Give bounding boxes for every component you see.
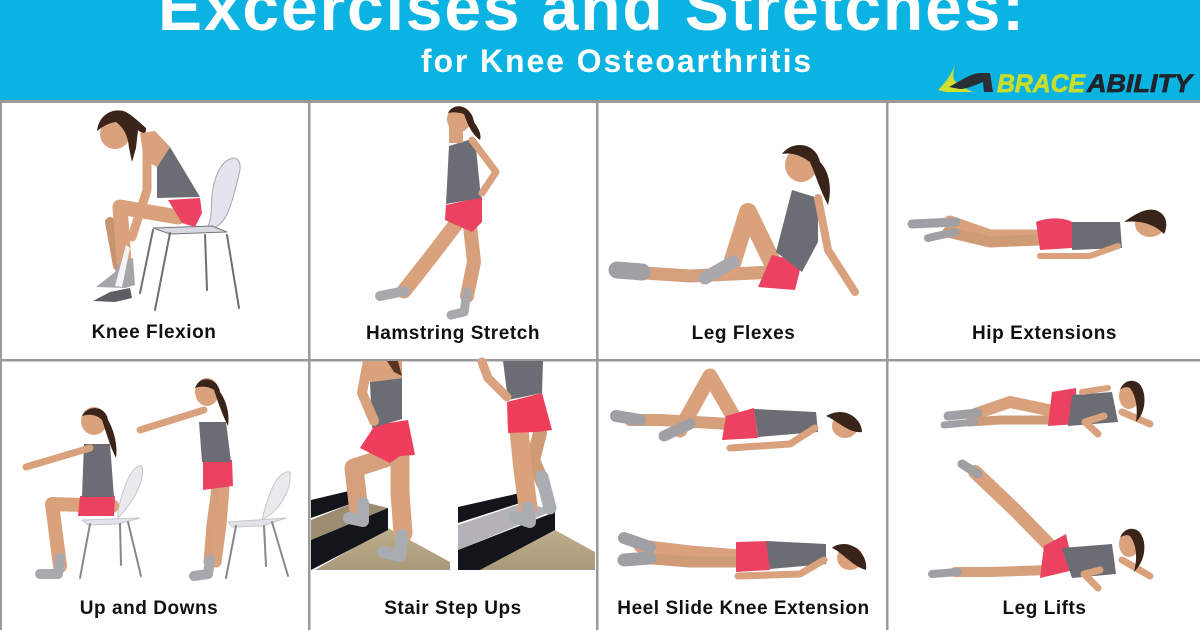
label: knee flexion: Knee Flexion bbox=[92, 322, 216, 343]
arm bbox=[132, 143, 147, 237]
label: leg flexes: Leg Flexes bbox=[692, 323, 795, 344]
figure: leg lifts bbox=[932, 464, 1150, 588]
shorts bbox=[168, 198, 202, 227]
label: heel slide knee extension: Heel Slide Knee Extension bbox=[617, 598, 870, 619]
figure: heel slide, knee bent bbox=[616, 376, 862, 448]
figure: heel slide, leg straight bbox=[624, 538, 866, 576]
figure: up and downs bbox=[26, 378, 290, 578]
header band bbox=[0, 0, 1200, 100]
second chair bbox=[262, 472, 290, 520]
figure: stair step ups, rear leg raised bbox=[458, 361, 595, 570]
figure: side lying, legs down bbox=[944, 381, 1150, 434]
label: hamstring stretch: Hamstring Stretch bbox=[366, 323, 540, 344]
figure: hip extensions bbox=[912, 210, 1166, 256]
subtitle: for Knee Osteoarthritis bbox=[421, 43, 813, 79]
label: hip extensions: Hip Extensions bbox=[972, 323, 1117, 344]
figure: stair step ups, front leg raised bbox=[311, 361, 450, 570]
label: up and downs: Up and Downs bbox=[80, 598, 218, 619]
label: leg lifts: Leg Lifts bbox=[1002, 598, 1087, 619]
figure: knee flexion bbox=[93, 110, 240, 310]
torso bbox=[157, 147, 200, 198]
socks bbox=[96, 258, 135, 288]
chair bbox=[208, 158, 240, 228]
legs bbox=[110, 222, 118, 266]
label: stair step ups: Stair Step Ups bbox=[384, 598, 522, 619]
figure: leg flexes bbox=[617, 145, 855, 292]
head bbox=[100, 119, 130, 149]
logo: BraceAbility bbox=[938, 64, 1195, 96]
figure: hamstring stretch bbox=[380, 106, 496, 315]
first chair bbox=[118, 466, 143, 518]
